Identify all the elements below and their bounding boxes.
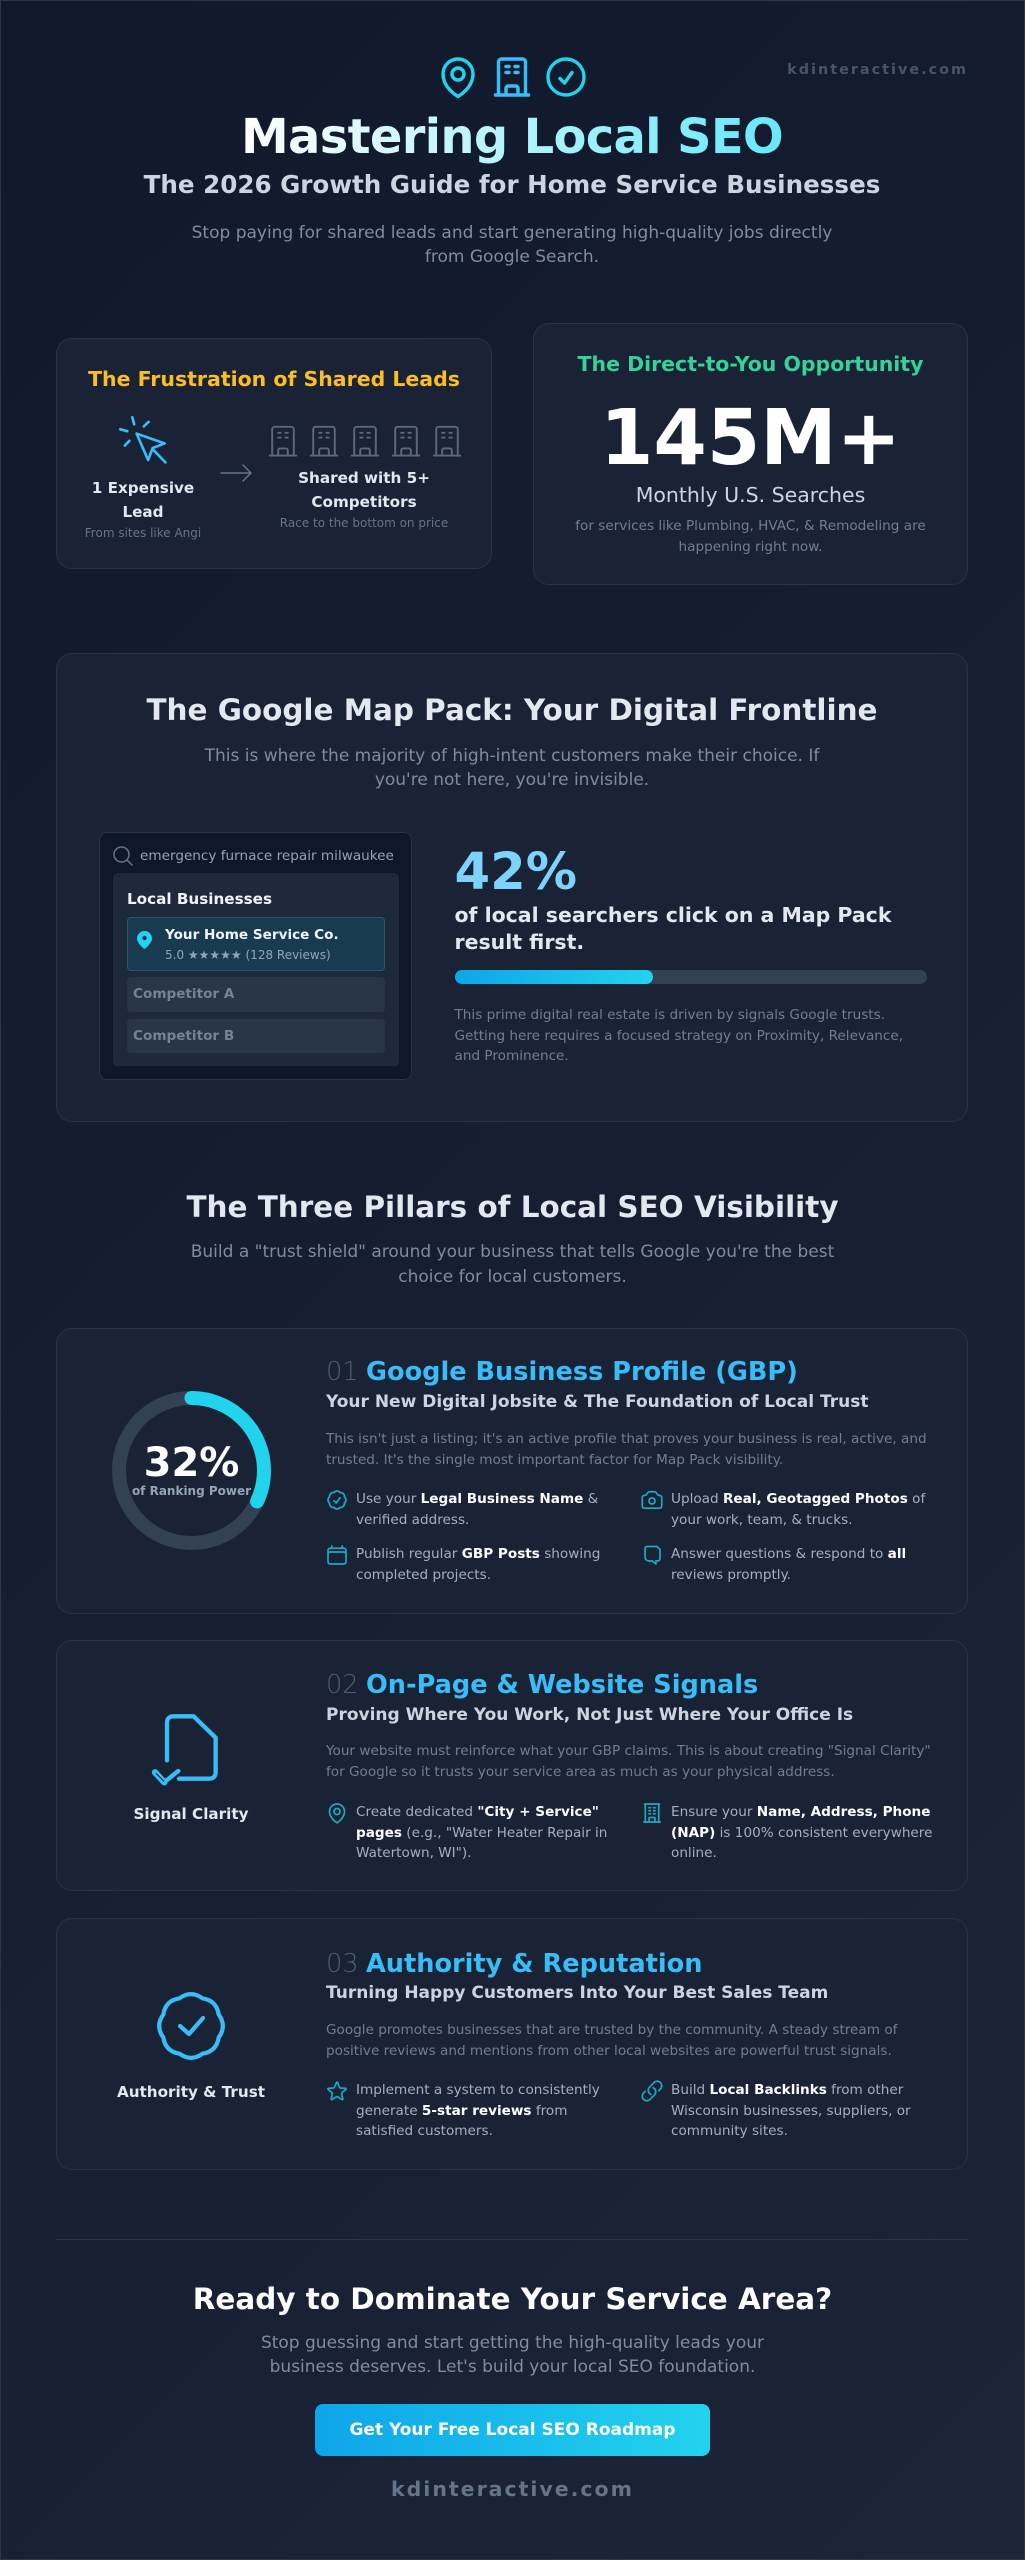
note: race to bottom: Race to the bottom on price	[280, 516, 448, 530]
intro text	[192, 223, 832, 267]
heading: opportunity: The Direct-to-You Opportunity	[578, 352, 923, 376]
stat description: of local searchers click on a Map Pack	[454, 902, 891, 926]
pillar subheading: Turning Happy Customers Into Your Best Sales Team	[326, 1983, 828, 2003]
icon: cursor click	[118, 416, 167, 464]
arrow	[220, 464, 252, 482]
item: legal business name	[327, 1490, 598, 1528]
donut value: 32%	[144, 1440, 239, 1486]
panel: direct-to-you opportunity	[533, 323, 968, 585]
item: five-star reviews: generate 5-star reviews from	[356, 2102, 568, 2118]
item: city service pages: Create dedicated "City + Service"	[356, 1804, 599, 1820]
panel: pillar 3 authority and reputation	[56, 1918, 968, 2170]
call to action text: business deserves. Let's build your local SEO foundation.	[270, 2356, 755, 2376]
pillar description	[326, 1743, 931, 1780]
competitor A	[127, 977, 385, 1012]
item: geotagged photos	[641, 1490, 926, 1528]
progress bar	[455, 970, 927, 984]
panel: pillar 1 google business profile	[56, 1328, 968, 1614]
item: five-star reviews: satisfied customers.	[356, 2123, 493, 2139]
icon: map pin	[443, 59, 473, 96]
intro: map pack	[204, 746, 820, 790]
search query: emergency furnace repair milwaukee	[140, 848, 394, 864]
intro: three pillars: Build a "trust shield" around your business that tells Google you're the best	[191, 1242, 834, 1262]
map pack explanation	[454, 1007, 903, 1064]
item: local backlinks: Wisconsin businesses, suppliers, or	[671, 2102, 911, 2118]
donut chart: 32 percent	[112, 1391, 271, 1550]
intro: three pillars: choice for local customers.	[398, 1267, 627, 1287]
heading: three pillars: The Three Pillars of Local SEO Visibility	[186, 1190, 839, 1224]
icon: building	[496, 59, 528, 95]
competitor B: Competitor B	[133, 1028, 234, 1044]
item: local backlinks: community sites.	[671, 2123, 788, 2139]
item: legal business name: verified address.	[356, 1512, 469, 1528]
rating: 5.0 ★★★★★ (128 Reviews)	[165, 948, 331, 962]
note: from sites: From sites like Angi	[85, 526, 201, 540]
item: local backlinks: Build Local Backlinks from other	[671, 2082, 903, 2098]
pillar description: positive reviews and mentions from other local websites are powerful trust signals.	[326, 2042, 892, 2058]
icon: solid pin	[137, 931, 152, 949]
item: city service pages: pages (e.g., "Water Heater Repair in	[356, 1824, 607, 1840]
subtitle: The 2026 Growth Guide for Home Service Businesses	[144, 170, 880, 199]
intro text: Stop paying for shared leads and start generating high-quality jobs directly	[192, 223, 832, 243]
icons: five competitor buildings	[268, 426, 462, 456]
stat label: Monthly U.S. Searches	[636, 483, 865, 507]
icon: document check	[152, 1714, 218, 1786]
stat description	[454, 902, 892, 954]
item: geotagged photos: your work, team, & trucks.	[671, 1512, 853, 1528]
pillar heading: 03 Authority & Reputation	[326, 1948, 702, 1978]
heading: call to action: Ready to Dominate Your Service Area?	[193, 2282, 832, 2316]
brand label top right: kdinteractive.com	[787, 62, 968, 78]
pillar description: trusted. It's the single most important factor for Map Pack visibility.	[326, 1452, 783, 1468]
item: five-star reviews	[327, 2081, 600, 2139]
call to action text	[261, 2332, 764, 2376]
item: city service pages: Watertown, WI").	[356, 1845, 472, 1861]
icon: check badge	[157, 1992, 225, 2060]
panel: frustration of shared leads	[56, 338, 492, 569]
pillar description: Google promotes businesses that are trusted by the community. A steady stream of	[326, 2022, 897, 2038]
label: signal clarity: Signal Clarity	[133, 1805, 249, 1823]
item: GBP posts	[327, 1545, 600, 1582]
results panel	[113, 873, 399, 1066]
pillar description: for Google so it trusts your service area as much as your physical address.	[326, 1764, 835, 1780]
label: expensive lead: Lead	[122, 503, 164, 521]
item: answer reviews	[644, 1546, 906, 1582]
title: Mastering Local SEO	[241, 109, 783, 165]
label: shared with competitors: Competitors	[311, 493, 417, 511]
map pack explanation: and Prominence.	[454, 1048, 569, 1064]
panel: pillar 2 on-page signals	[56, 1640, 968, 1891]
label: authority and trust: Authority & Trust	[117, 2083, 265, 2101]
icon: search	[113, 846, 133, 866]
results heading: Local Businesses	[127, 890, 272, 908]
item: answer reviews: Answer questions & respond to all	[671, 1546, 906, 1562]
search results mockup	[99, 832, 412, 1080]
pillar description	[326, 1431, 927, 1468]
label: shared with competitors: Shared with 5+	[298, 469, 430, 487]
stat description: result first.	[454, 930, 584, 954]
item: consistent NAP	[643, 1803, 932, 1861]
item: consistent NAP: (NAP) is 100% consistent everywhere	[671, 1824, 932, 1840]
pillar heading: 01 Google Business Profile (GBP)	[326, 1356, 798, 1386]
big stat: 145M+	[600, 394, 901, 483]
label: shared with competitors	[298, 469, 430, 511]
item: city service pages	[328, 1803, 607, 1861]
donut label: of Ranking Power	[132, 1484, 251, 1498]
stat note	[575, 518, 926, 555]
pillar description	[326, 2022, 898, 2058]
item: local backlinks	[641, 2080, 911, 2139]
label: expensive lead: 1 Expensive	[92, 479, 194, 497]
item: GBP posts: Publish regular GBP Posts showing	[356, 1546, 600, 1562]
button: free roadmap	[315, 2404, 710, 2456]
stat note: happening right now.	[679, 539, 822, 555]
intro: map pack: This is where the majority of high-intent customers make their choice. If	[205, 746, 819, 766]
progress fill 42%	[455, 970, 653, 984]
heading: shared leads: The Frustration of Shared Leads	[88, 367, 460, 391]
intro: three pillars	[191, 1242, 834, 1287]
item: answer reviews: reviews promptly.	[671, 1566, 791, 1582]
header icons	[441, 57, 586, 98]
label: expensive lead	[92, 479, 194, 521]
stat note: for services like Plumbing, HVAC, & Remodeling are	[575, 518, 926, 534]
highlighted result	[127, 917, 385, 971]
intro text: from Google Search.	[425, 247, 599, 267]
competitor B	[127, 1019, 385, 1053]
pillar description: Your website must reinforce what your GBP claims. This is about creating "Signal Clarity"	[326, 1743, 931, 1759]
button: free roadmap: Get Your Free Local SEO Roadmap	[349, 2420, 676, 2440]
pillar subheading: Your New Digital Jobsite & The Foundation of Local Trust	[326, 1392, 868, 1412]
pillar subheading: Proving Where You Work, Not Just Where Your Office Is	[326, 1705, 853, 1725]
map pack explanation: Getting here requires a focused strategy on Proximity, Relevance,	[454, 1028, 903, 1044]
competitor A: Competitor A	[133, 986, 234, 1002]
item: legal business name: Use your Legal Business Name &	[356, 1491, 598, 1507]
map pack explanation: This prime digital real estate is driven by signals Google trusts.	[454, 1007, 885, 1023]
item: five-star reviews: Implement a system to consistently	[356, 2082, 600, 2098]
item: consistent NAP: Ensure your Name, Address, Phone	[671, 1804, 930, 1820]
call to action text: Stop guessing and start getting the high-quality leads your	[261, 2332, 764, 2352]
icon: check circle	[548, 59, 584, 95]
pillar description: This isn't just a listing; it's an active profile that proves your business is real, active, and	[326, 1431, 927, 1447]
item: consistent NAP: online.	[671, 1845, 717, 1861]
pillar heading: 02 On-Page & Website Signals	[326, 1670, 758, 1700]
stat: 42 percent: 42%	[454, 842, 577, 902]
item: GBP posts: completed projects.	[356, 1566, 491, 1582]
panel: google map pack	[56, 653, 968, 1122]
heading: map pack: The Google Map Pack: Your Digital Frontline	[146, 693, 878, 727]
brand footer: kdinteractive.com	[391, 2477, 634, 2501]
item: geotagged photos: Upload Real, Geotagged Photos of	[671, 1491, 925, 1507]
intro: map pack: you're not here, you're invisible.	[375, 770, 649, 790]
business name: Your Home Service Co.	[165, 927, 339, 943]
